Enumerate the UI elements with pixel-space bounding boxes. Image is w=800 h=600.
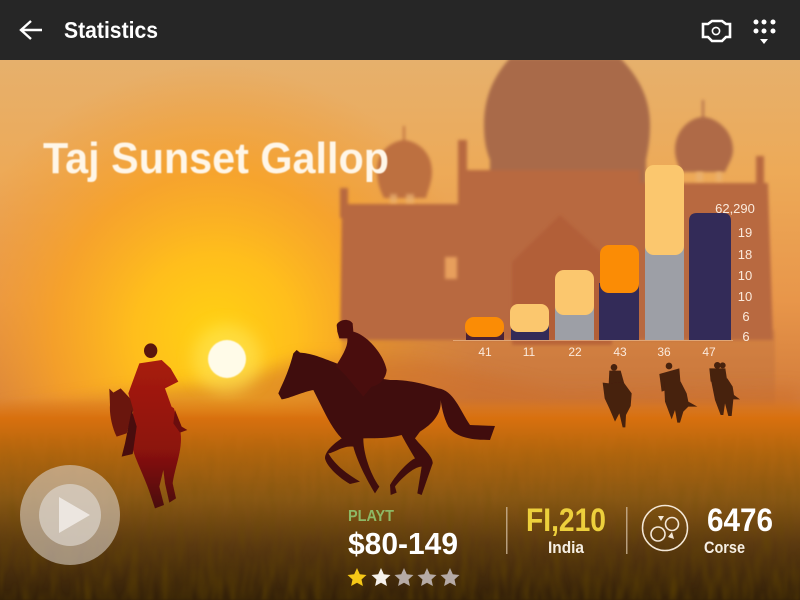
background: sunset sky [0, 60, 800, 440]
bar chart y axis labels: 19 [738, 225, 752, 240]
bar chart x axis labels: 22 [568, 345, 582, 359]
right horse and rider silhouette [278, 320, 495, 495]
India label: India [548, 538, 584, 557]
bar 1 [465, 317, 504, 340]
bar 2 [510, 304, 549, 340]
icon: dots menu [754, 20, 776, 44]
background: Taj Mahal arch details [390, 172, 722, 345]
bar chart y axis labels: 6 [742, 329, 750, 344]
course value: 6476 [707, 502, 773, 538]
distant riders [603, 362, 740, 427]
bar 4 [599, 245, 639, 340]
bar chart [453, 165, 755, 359]
star rating [348, 568, 460, 586]
stat: India [506, 502, 606, 557]
distant hills [0, 360, 800, 430]
stat: price [348, 508, 460, 586]
sun [193, 325, 261, 393]
bar 5 [645, 165, 684, 340]
bar chart y axis labels: 62,290 [715, 201, 755, 216]
stat: course [626, 502, 773, 557]
bar chart y axis labels: 18 [738, 247, 752, 262]
bar chart y axis labels: 6 [742, 309, 750, 324]
distant rider 3 [709, 362, 740, 416]
bar 3 [555, 270, 594, 340]
bar chart baseline [453, 340, 733, 341]
bar chart x axis labels: 47 [702, 345, 716, 359]
play button [20, 465, 120, 565]
bar chart y axis labels: 10 [738, 268, 752, 283]
bar chart x axis labels: 11 [523, 345, 536, 359]
icon: camera [703, 21, 730, 41]
distant rider 2 [659, 363, 697, 423]
header bar [0, 0, 800, 60]
distant rider 1 [603, 364, 632, 427]
left horse and rider silhouette [109, 343, 187, 508]
icon: course circle [642, 506, 688, 550]
bar chart x axis labels: 36 [657, 345, 671, 359]
bar chart x axis labels: 41 [478, 345, 492, 359]
India value: FI,210 [526, 502, 606, 538]
background: Taj Mahal silhouette [340, 58, 775, 405]
header title: Statistics [64, 17, 158, 43]
bar chart x axis labels: 43 [613, 345, 627, 359]
bar chart x axis labels [478, 345, 716, 359]
icon: back arrow [21, 21, 42, 39]
bar chart y axis labels: 10 [738, 289, 752, 304]
price label: PLAYT [348, 508, 394, 525]
course label: Corse [704, 538, 745, 557]
price value: $80-149 [348, 526, 458, 561]
title: Taj Sunset Gallop [43, 134, 389, 183]
bar 6 [689, 213, 731, 340]
bar chart y axis labels [715, 201, 755, 344]
grass field [0, 398, 800, 600]
